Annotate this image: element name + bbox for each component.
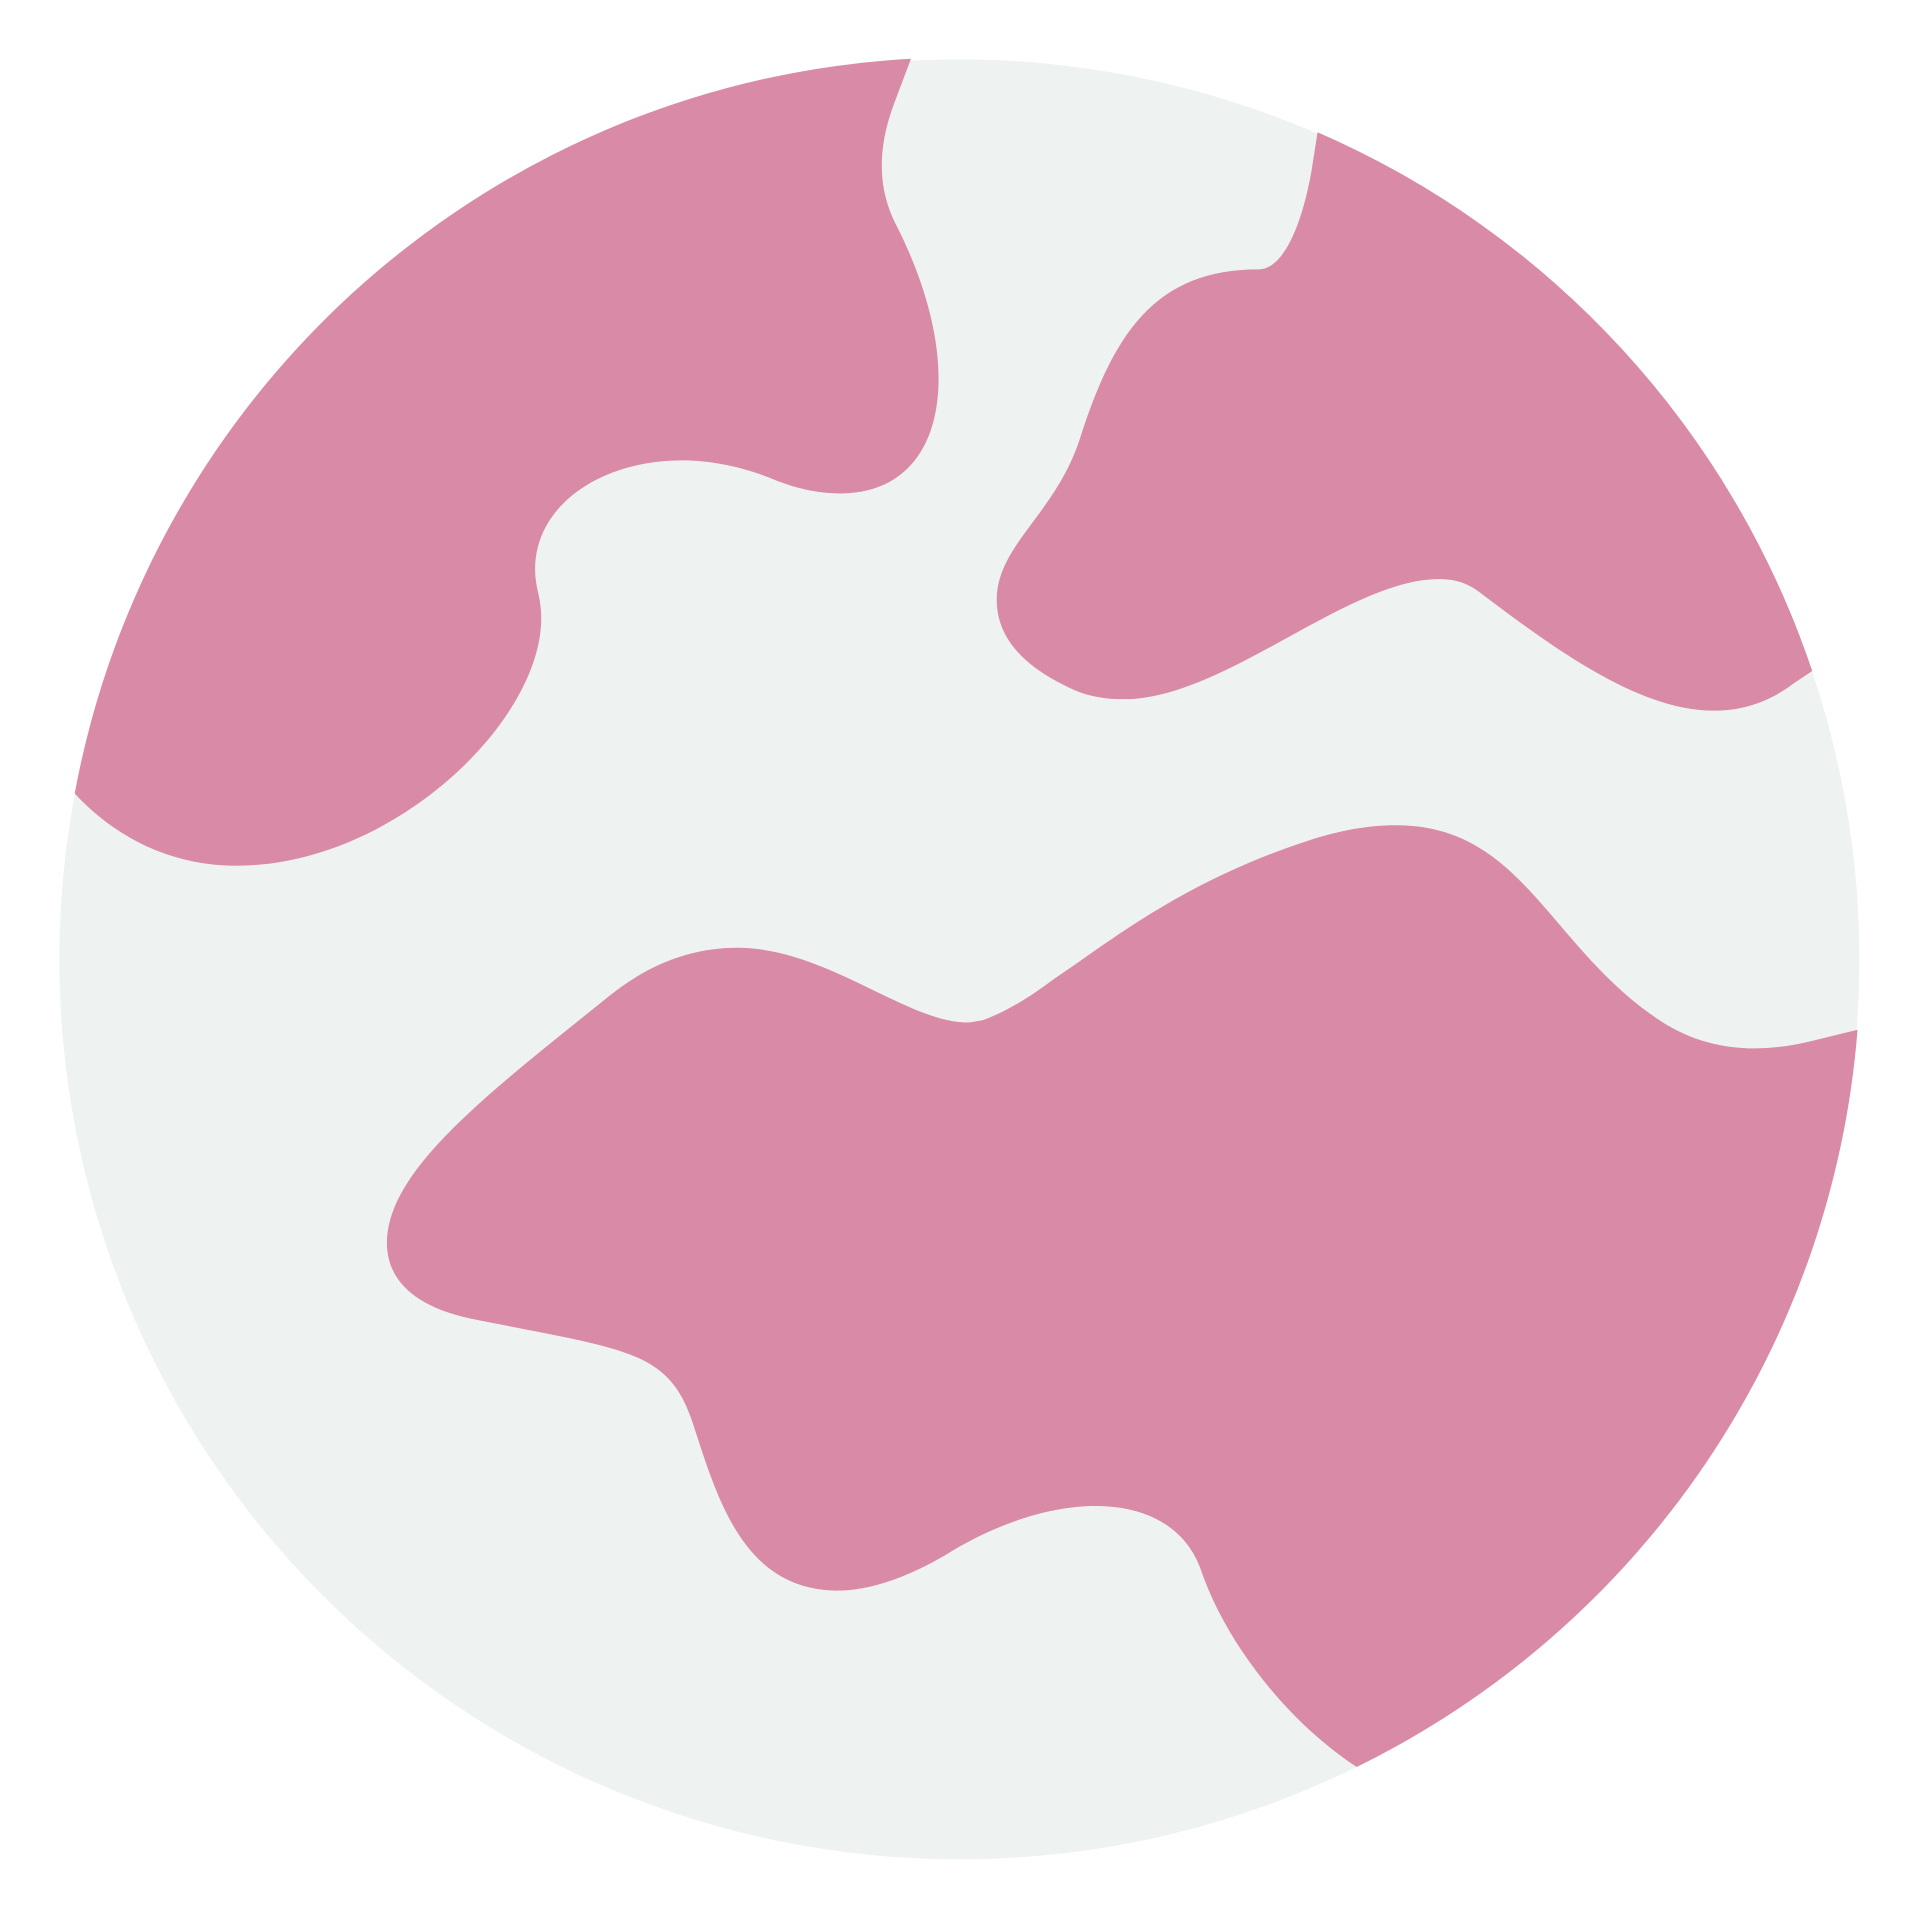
continent: upper left bbox=[75, 59, 939, 866]
continent: upper right bbox=[997, 132, 1812, 711]
continent: lower right bbox=[387, 825, 1858, 1767]
